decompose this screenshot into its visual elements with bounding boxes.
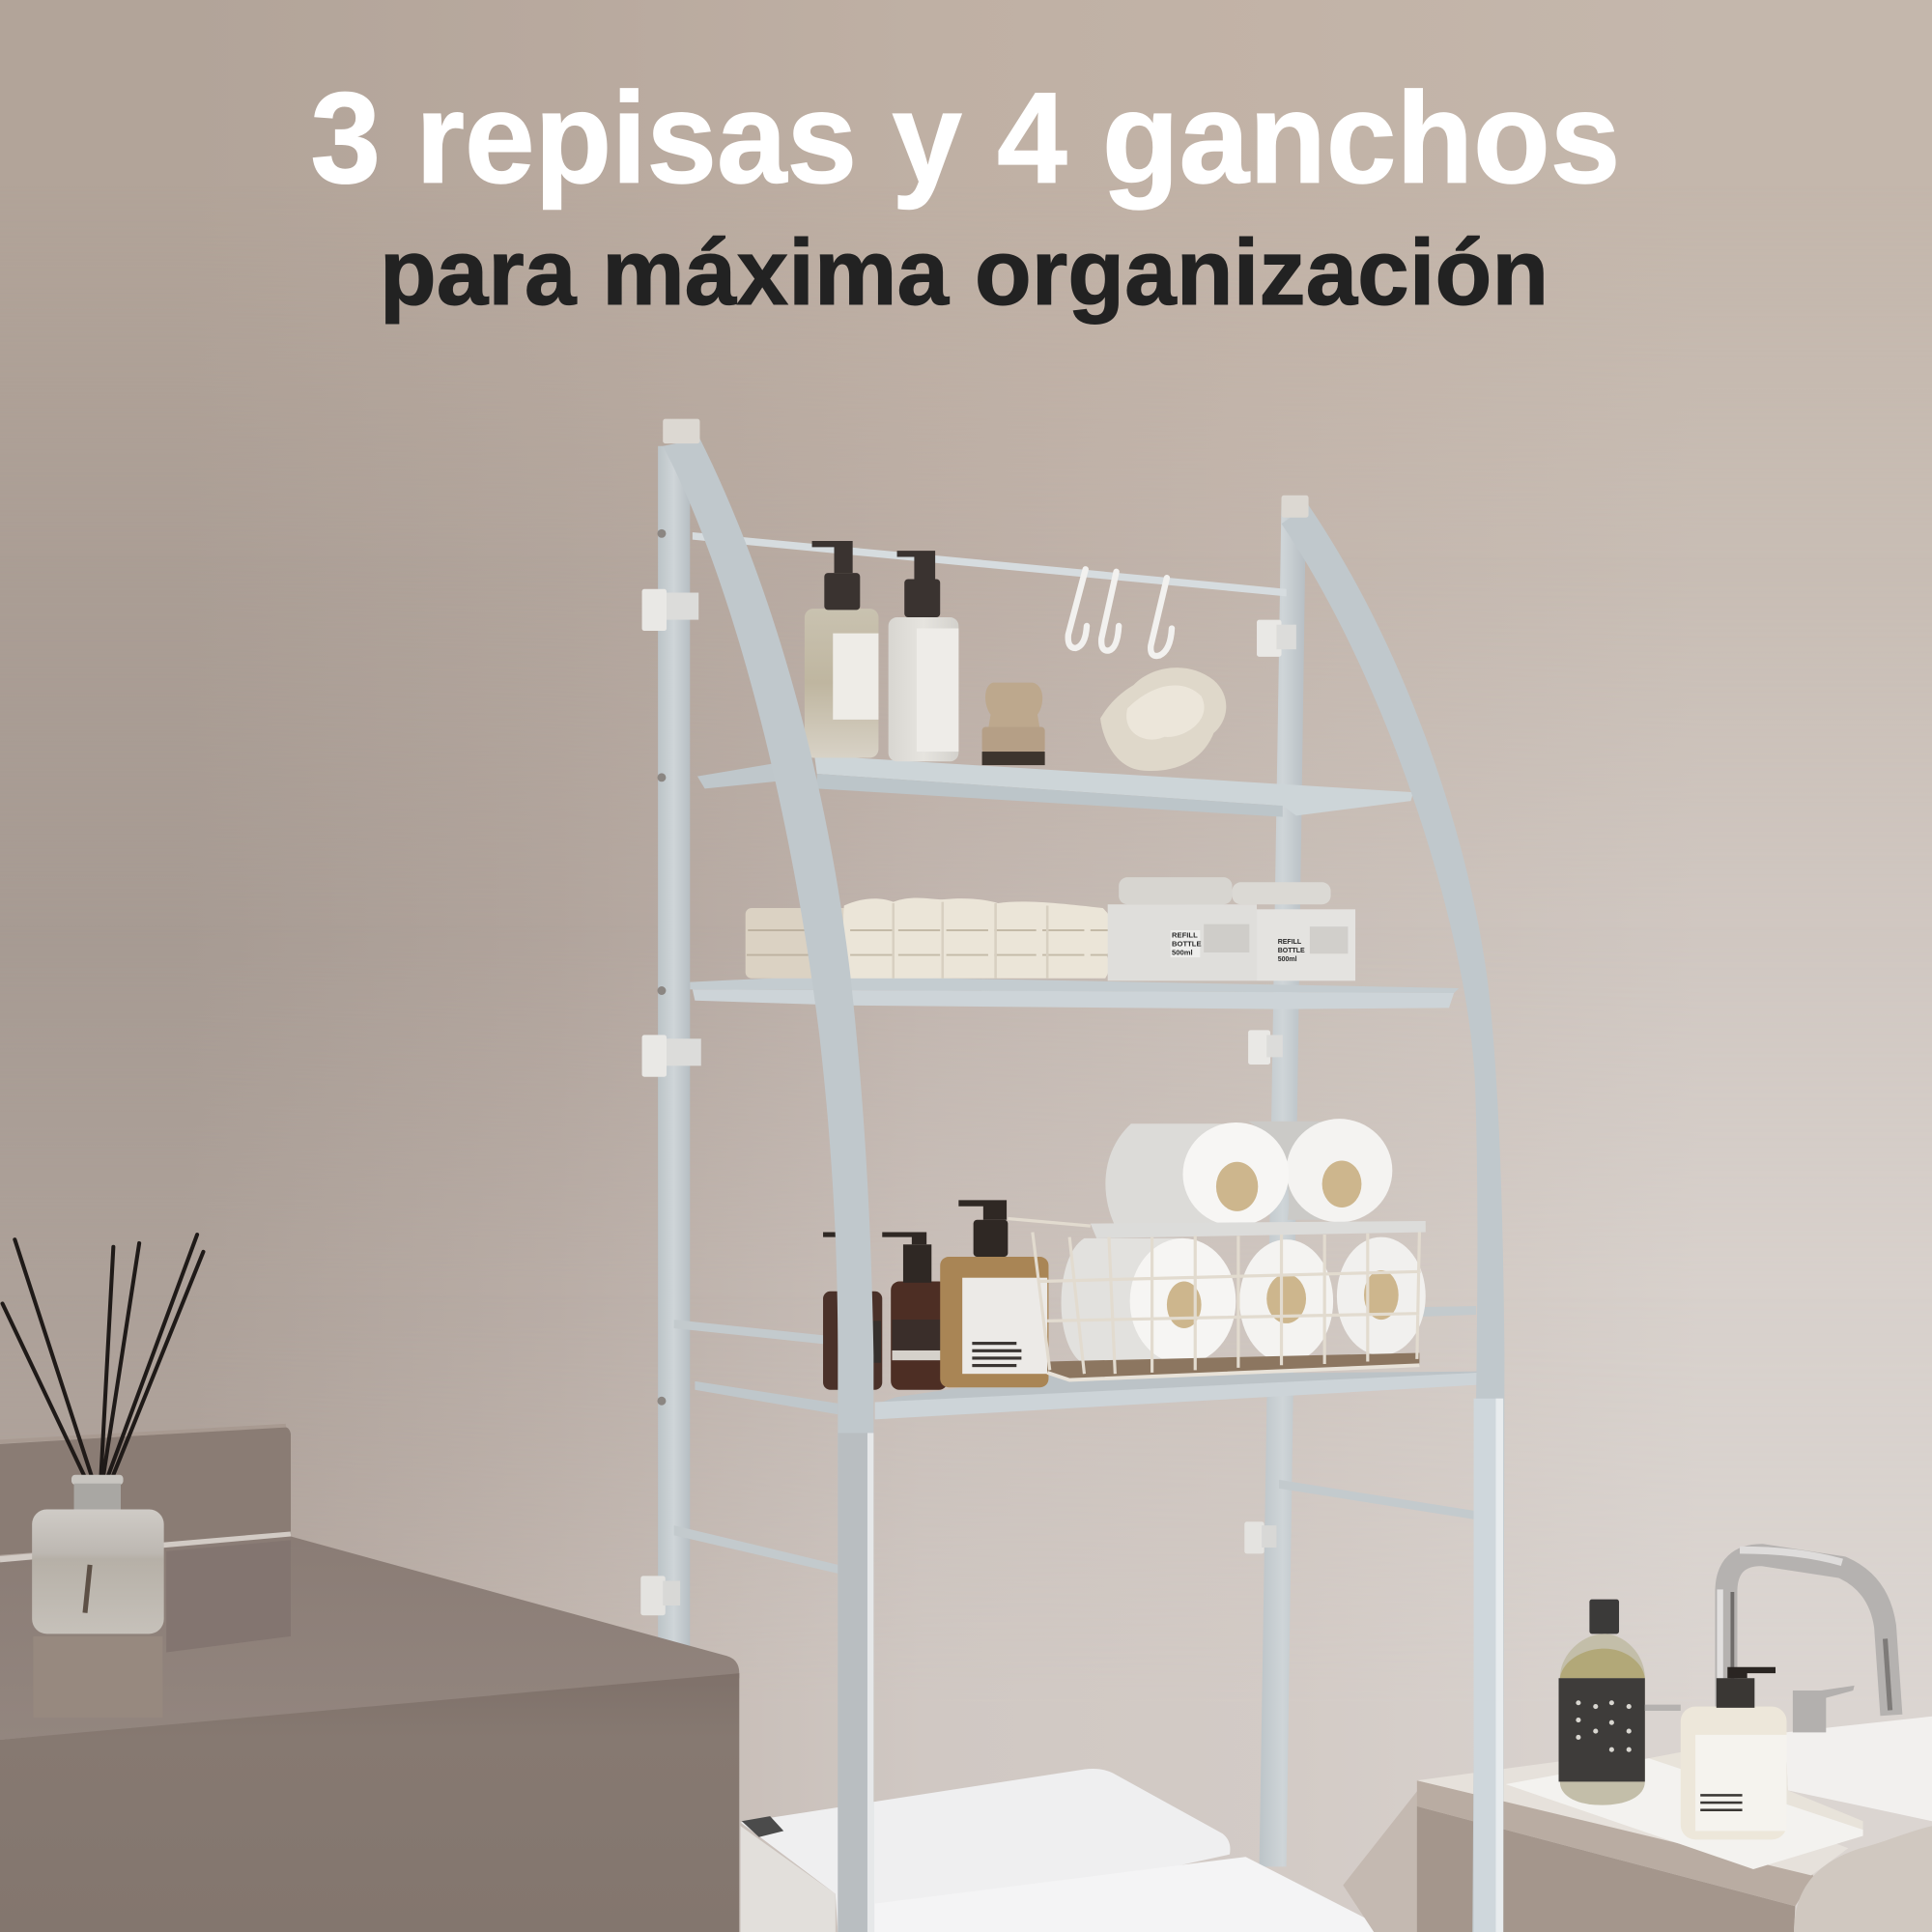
refill jar small: 500ml — [1278, 956, 1297, 963]
back right pole — [1260, 499, 1306, 1866]
refill jar large: BOTTLE — [1172, 940, 1202, 949]
sink basin — [1785, 1717, 1932, 1821]
folded towel corner — [1794, 1826, 1932, 1932]
faucet handle — [1793, 1686, 1855, 1732]
hanging rail — [693, 532, 1287, 596]
toilet label — [742, 1816, 783, 1837]
back left pole — [658, 446, 690, 1647]
dark pump bottle — [882, 1233, 948, 1390]
toilet front face — [741, 1826, 836, 1932]
refill jar small — [1233, 882, 1355, 980]
title — [310, 67, 1620, 325]
frame bolts — [657, 529, 666, 1406]
faucet — [1720, 1550, 1891, 1732]
stone backsplash — [0, 1426, 291, 1560]
diffuser jar — [32, 1509, 164, 1634]
bottom shelf items — [823, 1119, 1426, 1390]
front right arched leg — [1282, 496, 1504, 1932]
diffuser inner stick — [85, 1565, 90, 1613]
diffuser reeds — [3, 1235, 203, 1475]
clear soap pump bottle — [805, 541, 878, 757]
heading: main line: 3 repisas y 4 ganchos — [310, 67, 1620, 211]
toilet roll right — [1248, 1119, 1392, 1222]
soap bottle dark — [1559, 1600, 1681, 1805]
refill jar small: REFILL — [1278, 939, 1302, 946]
top shelf items — [805, 541, 1226, 771]
middle shelf items — [746, 877, 1355, 980]
amber pump bottle with label — [940, 1200, 1048, 1387]
toilet tank top — [741, 1769, 1230, 1932]
rolls inside basket — [1062, 1237, 1426, 1364]
icon: hooks — [1068, 569, 1172, 656]
top shelf — [697, 755, 1413, 817]
stone counter — [0, 1537, 739, 1932]
cross bars — [674, 1306, 1476, 1574]
diffuser neck — [71, 1475, 124, 1513]
toilet lid — [875, 1857, 1392, 1932]
soap tray — [1506, 1758, 1863, 1869]
reed diffuser — [3, 1235, 203, 1634]
refill jar large — [1108, 877, 1257, 980]
shelf unit front legs — [663, 419, 1504, 1932]
folded towels — [746, 897, 1111, 979]
front left arched leg — [663, 419, 873, 1932]
dark bottle back — [823, 1233, 882, 1390]
wire basket — [1008, 1218, 1426, 1380]
cabinet front — [1417, 1806, 1795, 1932]
heading: sub line: para máxima organización — [380, 219, 1548, 325]
white pump bottle — [889, 551, 958, 761]
soap pump white — [1681, 1667, 1786, 1839]
wall brackets — [640, 589, 1296, 1615]
counter reflections — [33, 1540, 291, 1718]
bottom shelf — [695, 1372, 1479, 1419]
vanity and sink — [1343, 1717, 1932, 1932]
wall shadow — [1343, 1786, 1421, 1932]
refill jar large: 500ml — [1172, 949, 1193, 957]
refill jar large: REFILL — [1172, 931, 1198, 940]
middle shelf — [690, 976, 1459, 1009]
refill jar small: BOTTLE — [1278, 948, 1305, 954]
bath sponge — [1100, 668, 1226, 771]
shelf unit back frame — [640, 446, 1479, 1866]
white worktop — [1417, 1756, 1848, 1875]
wooden brush — [982, 683, 1045, 765]
toilet roll left — [1105, 1122, 1289, 1226]
toilet — [741, 1769, 1392, 1932]
counter strip — [1417, 1780, 1814, 1906]
